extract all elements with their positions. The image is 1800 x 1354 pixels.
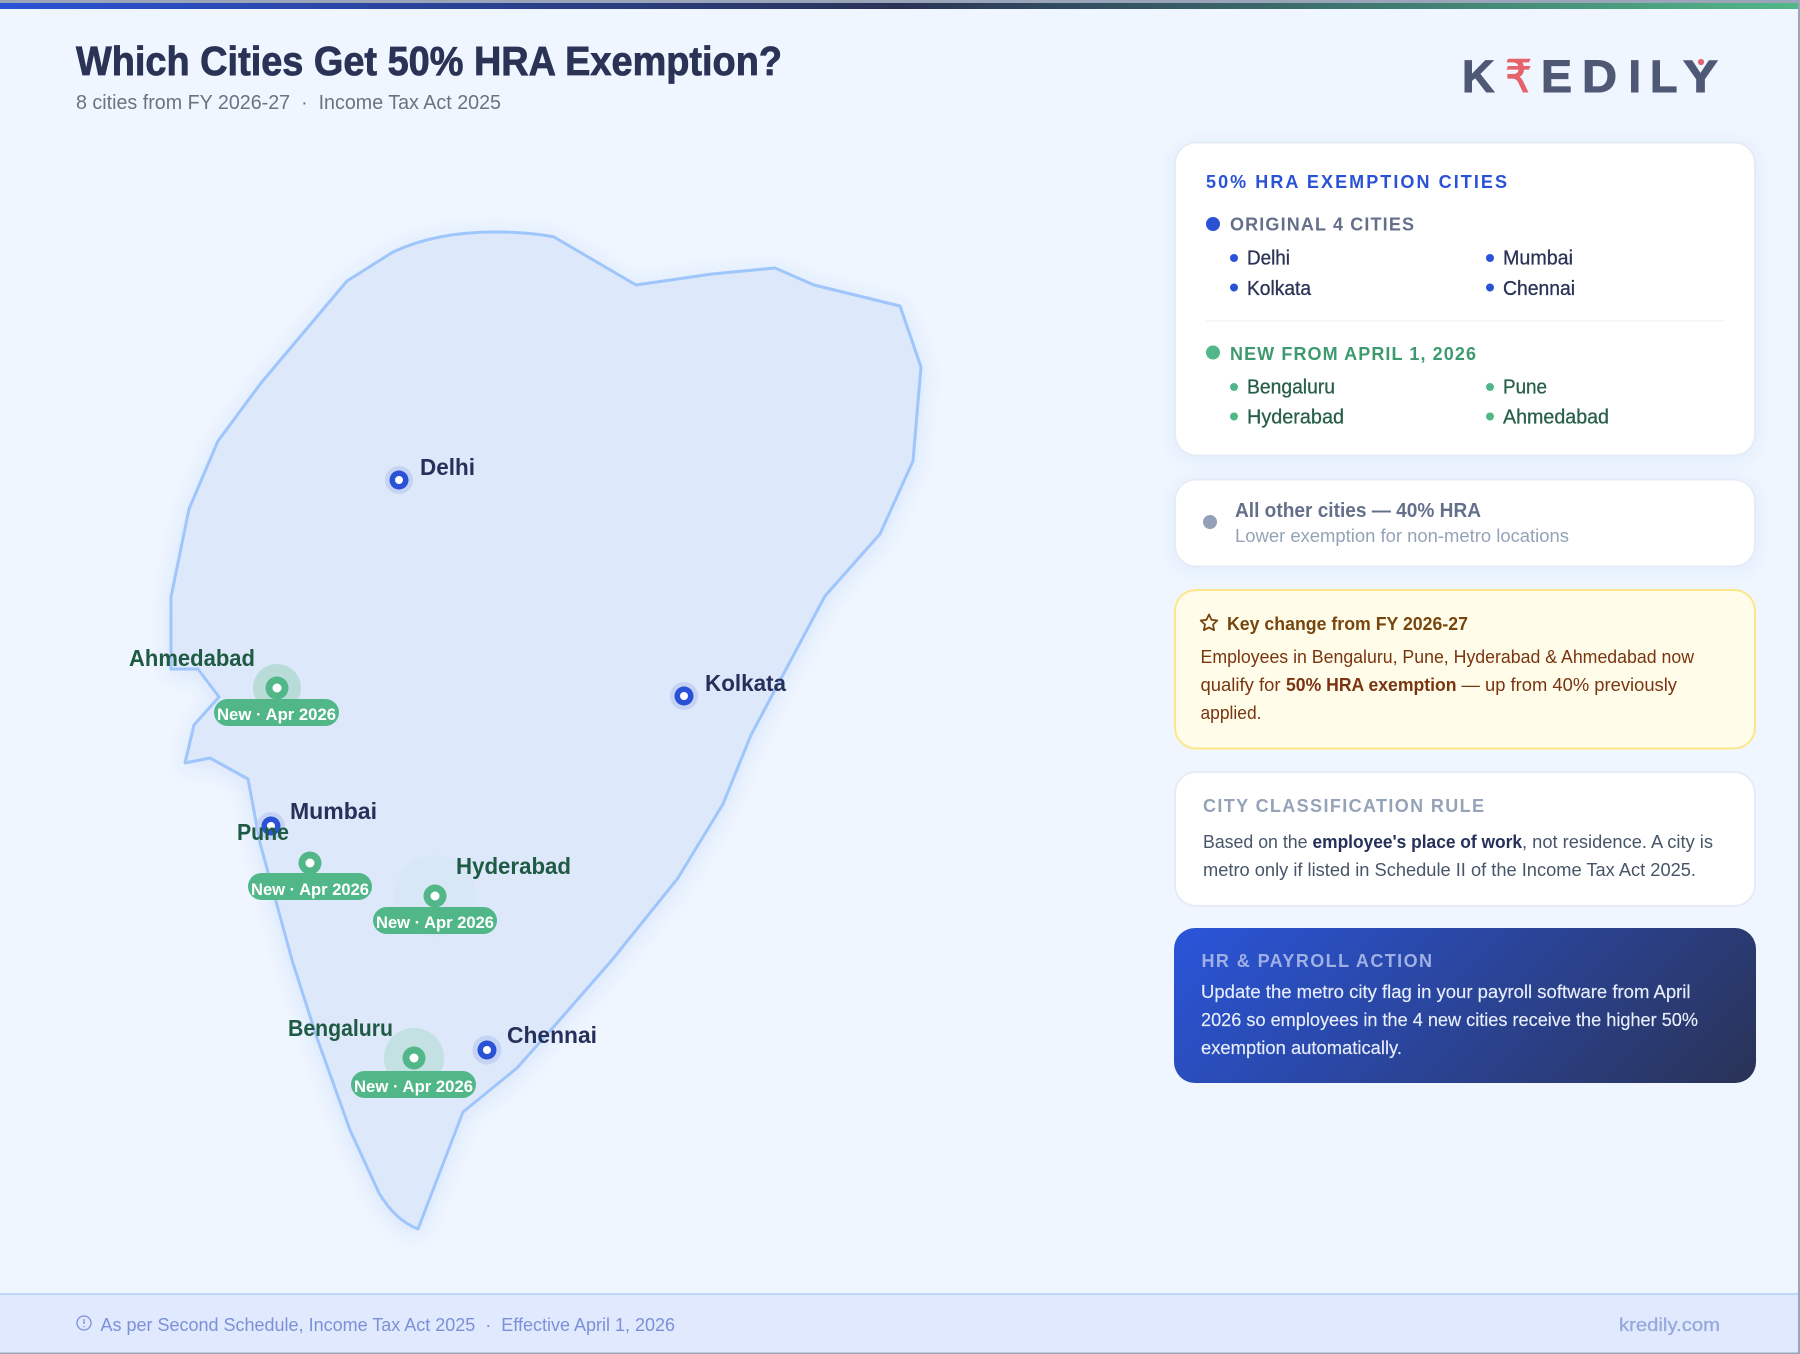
panel: HR and payroll action: HR & PAYROLL ACTION bbox=[1202, 951, 1432, 971]
panel: key change callout: 50% HRA exemption bbox=[1286, 675, 1456, 695]
marker: Mumbai: Mumbai bbox=[290, 798, 377, 824]
map of India bbox=[171, 232, 921, 1229]
marker: Bengaluru: New · Apr 2026 bbox=[354, 1077, 473, 1096]
panel: city classification rule: employee's place of work bbox=[1312, 832, 1523, 852]
panel: all other cities bbox=[1175, 480, 1755, 566]
panel: key change callout: qualify for bbox=[1200, 675, 1280, 695]
panel: all other cities: Lower exemption for non-metro locations bbox=[1235, 526, 1569, 546]
logo: Kredily: ₹ bbox=[1505, 51, 1532, 102]
group: new from April 1, 2026: Hyderabad bbox=[1247, 406, 1344, 428]
panel: city classification rule: , not residence. A city is bbox=[1522, 832, 1713, 852]
icon: star bbox=[1201, 614, 1217, 630]
panel: city classification rule: Based on the bbox=[1203, 832, 1308, 852]
panel: all other cities: All other cities — 40% HRA bbox=[1235, 500, 1481, 522]
marker: Pune bbox=[237, 819, 372, 900]
footer: kredily.com bbox=[1619, 1315, 1720, 1335]
marker: Kolkata: Kolkata bbox=[705, 670, 786, 696]
panel: HR and payroll action: exemption automatically. bbox=[1201, 1038, 1402, 1058]
logo: Kredily: E bbox=[1541, 51, 1572, 102]
group: new from April 1, 2026: Pune bbox=[1503, 376, 1547, 398]
panel: key change callout bbox=[1175, 590, 1755, 748]
marker: Ahmedabad: Ahmedabad bbox=[129, 645, 255, 671]
panel: HR and payroll action bbox=[1174, 928, 1756, 1083]
panel: 50% HRA exemption cities bbox=[1175, 142, 1755, 456]
icon: info bbox=[77, 1316, 91, 1330]
logo: Kredily bbox=[1462, 51, 1718, 102]
group: original 4 cities: Mumbai bbox=[1503, 248, 1573, 270]
marker: Ahmedabad: New · Apr 2026 bbox=[217, 705, 336, 724]
marker: Bengaluru bbox=[288, 1015, 476, 1098]
marker: Hyderabad: Hyderabad bbox=[456, 853, 571, 879]
group: new from April 1, 2026: Bengaluru bbox=[1247, 376, 1335, 398]
subtitle: 8 cities from FY 2026-27 · Income Tax Act 2025 bbox=[76, 92, 501, 114]
marker: Kolkata bbox=[670, 670, 786, 710]
group: new from April 1, 2026: NEW FROM APRIL 1, 2026 bbox=[1230, 344, 1476, 364]
panel: HR and payroll action: Update the metro city flag in your payroll software from April bbox=[1201, 982, 1690, 1002]
marker: Chennai bbox=[472, 1022, 597, 1064]
logo: Kredily: I bbox=[1628, 51, 1641, 102]
group: original 4 cities: Kolkata bbox=[1247, 278, 1312, 300]
marker: Hyderabad bbox=[373, 853, 571, 937]
panel: key change callout: applied. bbox=[1200, 703, 1262, 723]
marker: Hyderabad: New · Apr 2026 bbox=[376, 913, 494, 932]
marker: Delhi: Delhi bbox=[420, 454, 475, 480]
group: original 4 cities: Chennai bbox=[1503, 278, 1575, 300]
panel: key change callout: Key change from FY 2026-27 bbox=[1227, 614, 1468, 634]
group: original 4 cities: ORIGINAL 4 CITIES bbox=[1230, 214, 1414, 234]
logo: Kredily: Y bbox=[1683, 51, 1718, 102]
panel: HR and payroll action: 2026 so employees in the 4 new cities receive the higher 50% bbox=[1201, 1010, 1698, 1030]
title: Which Cities Get 50% HRA Exemption? bbox=[76, 38, 782, 84]
logo: Kredily: K bbox=[1462, 51, 1495, 102]
footer bbox=[0, 1293, 1800, 1354]
marker: Pune: Pune bbox=[237, 819, 289, 845]
marker: Bengaluru: Bengaluru bbox=[288, 1015, 393, 1041]
marker: Pune: New · Apr 2026 bbox=[251, 880, 369, 899]
group: original 4 cities: Delhi bbox=[1247, 248, 1290, 270]
footer: As per Second Schedule, Income Tax Act 2025 · Effective April 1, 2026 bbox=[100, 1315, 675, 1335]
panel: city classification rule: metro only if listed in Schedule II of the Income Tax Act 2025. bbox=[1203, 860, 1696, 880]
top gradient bar bbox=[0, 3, 1798, 9]
group: new from April 1, 2026: Ahmedabad bbox=[1503, 406, 1609, 428]
group: original 4 cities bbox=[1206, 214, 1575, 300]
panel: key change callout: — up from 40% previously bbox=[1462, 675, 1677, 695]
logo: Kredily: L bbox=[1650, 51, 1678, 102]
marker: Mumbai bbox=[257, 798, 377, 840]
group: new from April 1, 2026 bbox=[1206, 344, 1609, 428]
panel: key change callout: Employees in Bengaluru, Pune, Hyderabad & Ahmedabad now bbox=[1200, 647, 1695, 667]
panel heading: 50% HRA EXEMPTION CITIES bbox=[1206, 172, 1507, 192]
marker: Chennai: Chennai bbox=[507, 1022, 597, 1048]
marker: Ahmedabad bbox=[129, 645, 339, 726]
logo: Kredily: D bbox=[1582, 51, 1617, 102]
marker: Delhi bbox=[385, 454, 475, 494]
panel: city classification rule bbox=[1175, 772, 1755, 906]
panel: city classification rule: CITY CLASSIFICATION RULE bbox=[1203, 796, 1484, 816]
